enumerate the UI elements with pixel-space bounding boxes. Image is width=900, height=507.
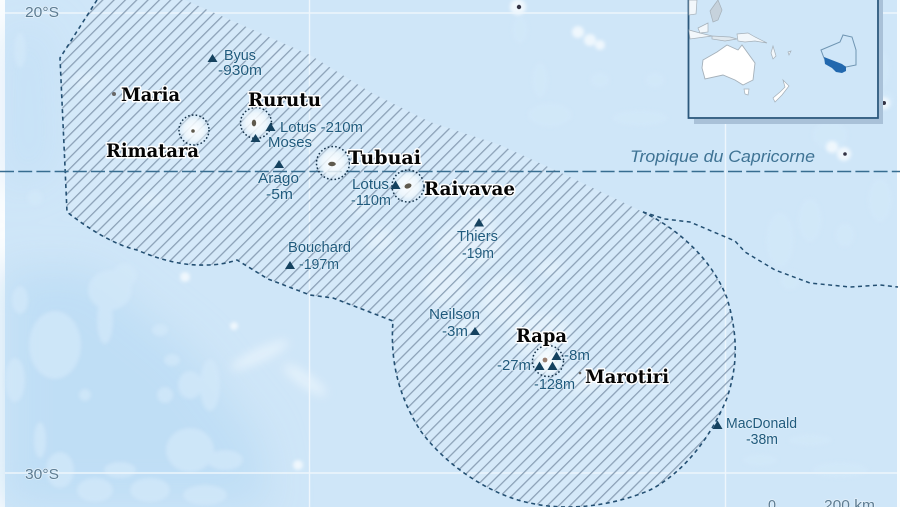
- distant islands: [517, 5, 886, 156]
- seamount labels: -128m: [534, 377, 575, 393]
- seamount labels: -110m: [351, 193, 391, 209]
- island name labels: Maria: [121, 84, 180, 106]
- inset Austral zone: [824, 57, 846, 73]
- seamount labels: Lotus -210m: [280, 120, 363, 136]
- island name labels: Rimatara: [106, 140, 199, 162]
- island name labels: [106, 84, 669, 388]
- tropic of Capricorn line: [0, 170, 900, 172]
- inset New Zealand: [773, 80, 789, 102]
- neighbouring zone boundary: [643, 212, 898, 287]
- island specks: [112, 92, 581, 374]
- island name labels: Tubuai: [348, 147, 421, 169]
- seamount labels: -19m: [462, 246, 494, 262]
- seamount labels: Neilson: [429, 307, 480, 323]
- seamount labels: -930m: [218, 63, 262, 79]
- island name labels: Rurutu: [248, 89, 321, 111]
- island name labels: Raivavae: [424, 178, 515, 200]
- inset frame: [688, 0, 878, 118]
- scale bar labels: [768, 497, 875, 507]
- inset locator map: [688, 0, 883, 124]
- inset French Polynesia outline: [821, 35, 856, 67]
- seamount labels: -38m: [746, 432, 778, 448]
- island name labels: Marotiri: [585, 366, 669, 388]
- zone boundary dashed: [60, 0, 735, 507]
- seamount labels: Lotus: [352, 177, 389, 193]
- latitude label 30S: 30°S: [25, 466, 59, 483]
- seamount labels: [218, 48, 797, 448]
- inset shadow: [694, 0, 883, 124]
- seamount labels: -3m: [442, 324, 468, 340]
- seamount labels: Arago: [258, 171, 299, 187]
- seamount labels: Moses: [268, 135, 312, 151]
- seamount labels: -27m: [497, 358, 531, 374]
- island name labels: Rapa: [516, 325, 567, 347]
- inset Indonesia and New Guinea: [689, 0, 791, 59]
- inset Tasmania: [744, 89, 749, 95]
- seamount labels: -8m: [564, 348, 590, 364]
- bright reef spots: [180, 0, 890, 470]
- seamount labels: Thiers: [457, 229, 498, 245]
- seamount labels: MacDonald: [726, 416, 797, 432]
- tropic label: Tropique du Capricorne: [630, 147, 815, 166]
- pale patches inside zone: [73, 49, 609, 401]
- seamount labels: -5m: [266, 187, 293, 203]
- seamount triangles: [208, 54, 722, 429]
- seamount labels: Bouchard: [288, 240, 351, 256]
- seamount labels: Byus: [224, 48, 256, 64]
- latitude label 20S: 20°S: [25, 4, 59, 21]
- island circles: [179, 108, 564, 376]
- hatched exclusive economic zone: [60, 0, 735, 507]
- inset Australia: [702, 45, 755, 85]
- seamount labels: -197m: [299, 257, 339, 273]
